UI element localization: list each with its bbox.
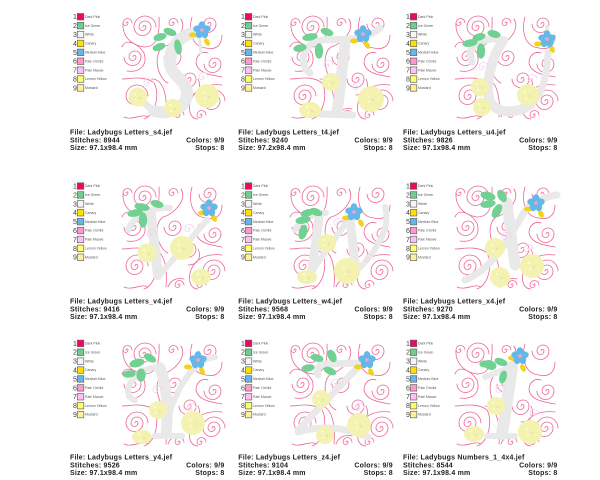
panel: Ladybugs Letters z4 [238,340,393,477]
colour legend: Canary [418,368,430,372]
file info: Colors: 9/9 [519,462,558,469]
colour legend: 3 [406,201,410,208]
colour legend [241,14,275,92]
colour legend: 2 [406,23,410,30]
colour legend: Canary [418,42,430,46]
colour legend: White [253,359,262,363]
file info: Stitches: 9240 [238,137,288,144]
colour legend: Pale Mauve [85,395,104,399]
colour legend: 3 [241,32,245,39]
colour legend: 5 [241,376,245,383]
colour legend: 5 [241,50,245,57]
colour legend: Pale Orchid [418,229,436,233]
colour legend: 1 [73,14,77,21]
colour legend: 8 [241,403,245,410]
file info: Stitches: 9104 [238,462,288,469]
file info: Colors: 9/9 [186,306,224,313]
colour legend: 3 [241,201,245,208]
colour legend: 7 [73,68,77,75]
colour legend: 4 [73,367,77,374]
colour legend: 7 [73,237,77,244]
colour legend: Lemon Yellow [253,404,275,408]
colour legend: 1 [73,341,77,348]
file info: Stops: 8 [364,145,393,152]
colour legend: Mustard [253,413,266,417]
file info: Stitches: 9526 [70,462,120,469]
colour legend: Ice Green [253,350,268,354]
file info: Size: 97.1x98.4 mm [70,470,137,477]
file info: Stitches: 9826 [403,137,453,144]
file info: Stitches: 9416 [70,306,120,313]
colour legend: Mustard [253,255,266,259]
colour legend: Medium Blue [253,377,273,381]
file info: Colors: 9/9 [354,462,393,469]
colour legend: 8 [73,246,77,253]
colour legend: 8 [406,246,410,253]
panel: Ladybugs Letters w4 [238,183,393,321]
colour legend: Canary [253,368,265,372]
colour legend: Medium Blue [85,50,105,54]
colour legend: Pale Orchid [85,59,103,63]
colour legend: Ice Green [253,24,268,28]
file info: File: Ladybugs Numbers_1_4x4.jef [403,454,525,462]
file info [238,298,393,321]
colour legend: 6 [73,385,77,392]
colour legend: 4 [241,210,245,217]
file info: File: Ladybugs Letters_t4.jef [238,130,339,136]
colour legend: 2 [73,192,77,199]
colour legend [406,183,440,262]
colour legend: 1 [406,341,410,348]
colour legend: 1 [406,14,410,21]
colour legend: Ice Green [253,193,268,197]
file info: Stops: 8 [195,145,224,152]
file info: Size: 97.2x98.4 mm [238,145,306,152]
colour legend: 6 [406,385,410,392]
colour legend: 7 [241,237,245,244]
file info: File: Ladybugs Letters_y4.jef [70,454,173,462]
embroidery design: letter V [122,186,225,289]
colour legend: 6 [73,59,77,66]
colour legend: 8 [241,77,245,84]
colour legend: 9 [241,85,245,92]
file info: Size: 97.1x98.4 mm [403,470,470,477]
colour legend: 1 [241,341,245,348]
file info [238,454,393,477]
file info: Stitches: 8944 [70,137,120,144]
colour legend: Lemon Yellow [418,246,440,250]
colour legend: 5 [73,50,77,57]
colour legend [73,340,107,419]
colour legend: 7 [406,68,410,75]
colour legend: 9 [406,412,410,419]
file info [70,130,224,152]
colour legend: 9 [406,85,410,92]
colour legend: Medium Blue [418,377,438,381]
colour legend: 3 [73,32,77,39]
file info: File: Ladybugs Letters_v4.jef [70,298,173,306]
colour legend: Lemon Yellow [418,77,440,81]
colour legend: Pale Orchid [253,59,271,63]
file info: File: Ladybugs Letters_w4.jef [238,298,343,306]
file info [238,130,393,152]
colour legend: 8 [241,246,245,253]
colour legend: 6 [241,59,245,66]
embroidery design: letter X [455,186,558,289]
file info: File: Ladybugs Letters_s4.jef [70,130,173,136]
embroidery design: letter U [455,16,558,119]
colour legend: Medium Blue [253,220,273,224]
embroidery design: letter T [290,16,393,119]
panel: Ladybugs Letters v4 [70,183,225,321]
colour legend: Canary [418,211,430,215]
colour legend: Dark Pink [85,184,100,188]
colour legend: 3 [241,359,245,366]
colour legend: 9 [406,255,410,262]
panel: Ladybugs Letters y4 [70,340,225,477]
colour legend: Pale Orchid [418,386,436,390]
file info: Stops: 8 [528,145,558,152]
colour legend: Canary [253,211,265,215]
colour legend: 1 [73,184,77,190]
colour legend: 9 [73,412,77,419]
colour legend: 8 [406,403,410,410]
colour legend: 8 [406,77,410,84]
colour legend [406,14,440,92]
colour legend: 2 [241,192,245,199]
file info: Colors: 9/9 [519,306,558,313]
colour legend [241,183,275,262]
file info: Size: 97.1x98.4 mm [70,145,137,152]
colour legend: 5 [73,376,77,383]
colour legend: 3 [73,201,77,208]
colour legend: Dark Pink [253,341,268,345]
colour legend: Dark Pink [253,15,268,19]
colour legend: Canary [85,211,97,215]
colour legend: Dark Pink [418,15,433,19]
colour legend: Pale Orchid [85,386,103,390]
embroidery design: number 1 [455,343,558,446]
colour legend: Lemon Yellow [85,246,107,250]
colour legend: Pale Mauve [418,395,437,399]
file info: Stops: 8 [528,314,558,321]
file info: Stops: 8 [528,470,558,477]
file info: Colors: 9/9 [354,137,393,144]
colour legend [241,340,275,419]
colour legend: Mustard [85,255,98,259]
file info [70,454,224,477]
colour legend: 9 [73,85,77,92]
file info: Stops: 8 [364,470,393,477]
file info: Colors: 9/9 [186,462,224,469]
file info [403,454,558,477]
colour legend: 8 [73,77,77,84]
colour legend: 5 [73,219,77,226]
colour legend: 1 [241,184,245,190]
colour legend: 2 [73,23,77,30]
colour legend: 7 [406,237,410,244]
colour legend: 9 [241,255,245,262]
colour legend: White [418,202,427,206]
file info: Stops: 8 [195,314,224,321]
panel: Ladybugs Letters t4 [238,14,393,152]
colour legend: 7 [406,394,410,401]
colour legend: Dark Pink [418,341,433,345]
colour legend: Ice Green [85,24,100,28]
colour legend: 2 [241,350,245,357]
file info: Stops: 8 [364,314,393,321]
colour legend: 7 [73,394,77,401]
file info: Stitches: 9568 [238,306,288,313]
colour legend: Ice Green [418,350,433,354]
colour legend: Pale Orchid [253,386,271,390]
colour legend: 4 [241,367,245,374]
colour legend: Pale Mauve [418,68,437,72]
colour legend: Dark Pink [253,184,268,188]
colour legend: White [85,33,94,37]
colour legend: Dark Pink [418,184,433,188]
colour legend: 2 [406,350,410,357]
colour legend: 4 [73,41,77,48]
colour legend: Medium Blue [85,220,105,224]
file info: Stitches: 8544 [403,462,453,469]
colour legend: White [85,359,94,363]
panel: Ladybugs Letters u4 [403,14,558,152]
colour legend: Pale Mauve [253,68,272,72]
file info: Size: 97.1x98.4 mm [403,314,470,321]
colour legend: 6 [406,59,410,66]
colour legend: Medium Blue [253,50,273,54]
colour legend: Canary [85,42,97,46]
panel: Ladybugs Numbers 1 4x4 [403,340,558,477]
file info: Size: 97.1x98.4 mm [70,314,137,321]
colour legend: Pale Orchid [85,229,103,233]
embroidery design: letter W [290,186,393,289]
file info [70,298,224,321]
colour legend: 5 [406,50,410,57]
file info [403,130,558,152]
colour legend: White [85,202,94,206]
colour legend: 2 [73,350,77,357]
colour legend: Lemon Yellow [85,77,107,81]
colour legend: 4 [406,367,410,374]
colour legend: 2 [241,23,245,30]
file info: Size: 97.1x98.4 mm [238,314,306,321]
colour legend: 4 [406,210,410,217]
colour legend: 5 [406,376,410,383]
colour legend: 3 [73,359,77,366]
colour legend: Canary [85,368,97,372]
colour legend: Pale Mauve [85,68,104,72]
colour legend [73,14,107,92]
colour legend: Mustard [418,255,431,259]
colour legend: 6 [73,228,77,235]
colour legend: 1 [241,14,245,21]
colour legend: Pale Mauve [418,238,437,242]
colour legend: White [253,33,262,37]
colour legend: 9 [73,255,77,262]
colour legend: 3 [406,32,410,39]
file info: File: Ladybugs Letters_z4.jef [238,454,341,462]
colour legend: Pale Mauve [85,238,104,242]
colour legend: 6 [241,385,245,392]
colour legend: Mustard [85,86,98,90]
file info: Stops: 8 [195,470,224,477]
colour legend: Lemon Yellow [253,246,275,250]
colour legend: White [253,202,262,206]
colour legend: Dark Pink [85,341,100,345]
colour legend: 1 [406,184,410,190]
colour legend: 6 [406,228,410,235]
colour legend: 7 [241,394,245,401]
panel: Ladybugs Letters s4 [70,14,225,152]
colour legend: Lemon Yellow [253,77,275,81]
colour legend: White [418,359,427,363]
colour legend: Ice Green [85,193,100,197]
colour legend [73,183,107,262]
colour legend: White [418,33,427,37]
file info: Size: 97.1x98.4 mm [238,470,306,477]
file info: File: Ladybugs Letters_x4.jef [403,298,506,306]
colour legend: Ice Green [85,350,100,354]
file info: Stitches: 9270 [403,306,453,313]
colour legend: Ice Green [418,193,433,197]
colour legend [406,340,440,419]
colour legend: 4 [241,41,245,48]
colour legend: Pale Mauve [253,238,272,242]
colour legend: Medium Blue [85,377,105,381]
colour legend: 5 [406,219,410,226]
colour legend: Canary [253,42,265,46]
colour legend: 3 [406,359,410,366]
colour legend: 5 [241,219,245,226]
colour legend: Mustard [418,86,431,90]
colour legend: Medium Blue [418,50,438,54]
colour legend: Pale Orchid [253,229,271,233]
file info: Colors: 9/9 [186,137,224,144]
colour legend: 2 [406,192,410,199]
colour legend: Medium Blue [418,220,438,224]
colour legend: Pale Mauve [253,395,272,399]
file info: File: Ladybugs Letters_u4.jef [403,130,506,136]
colour legend: Mustard [418,413,431,417]
colour legend: 4 [406,41,410,48]
colour legend: 6 [241,228,245,235]
colour legend: Mustard [85,413,98,417]
colour legend: Dark Pink [85,15,100,19]
colour legend: Pale Orchid [418,59,436,63]
panel: Ladybugs Letters x4 [403,183,558,321]
file info: Colors: 9/9 [354,306,393,313]
colour legend: Lemon Yellow [85,404,107,408]
file info [403,298,558,321]
colour legend: Mustard [253,86,266,90]
colour legend: 8 [73,403,77,410]
file info: Size: 97.1x98.4 mm [403,145,470,152]
colour legend: 7 [241,68,245,75]
colour legend: Ice Green [418,24,433,28]
colour legend: Lemon Yellow [418,404,440,408]
embroidery design: letter Y [122,343,225,446]
colour legend: 9 [241,412,245,419]
embroidery design: letter S [122,16,225,119]
embroidery design: letter Z [290,343,393,446]
file info: Colors: 9/9 [519,137,558,144]
colour legend: 4 [73,210,77,217]
